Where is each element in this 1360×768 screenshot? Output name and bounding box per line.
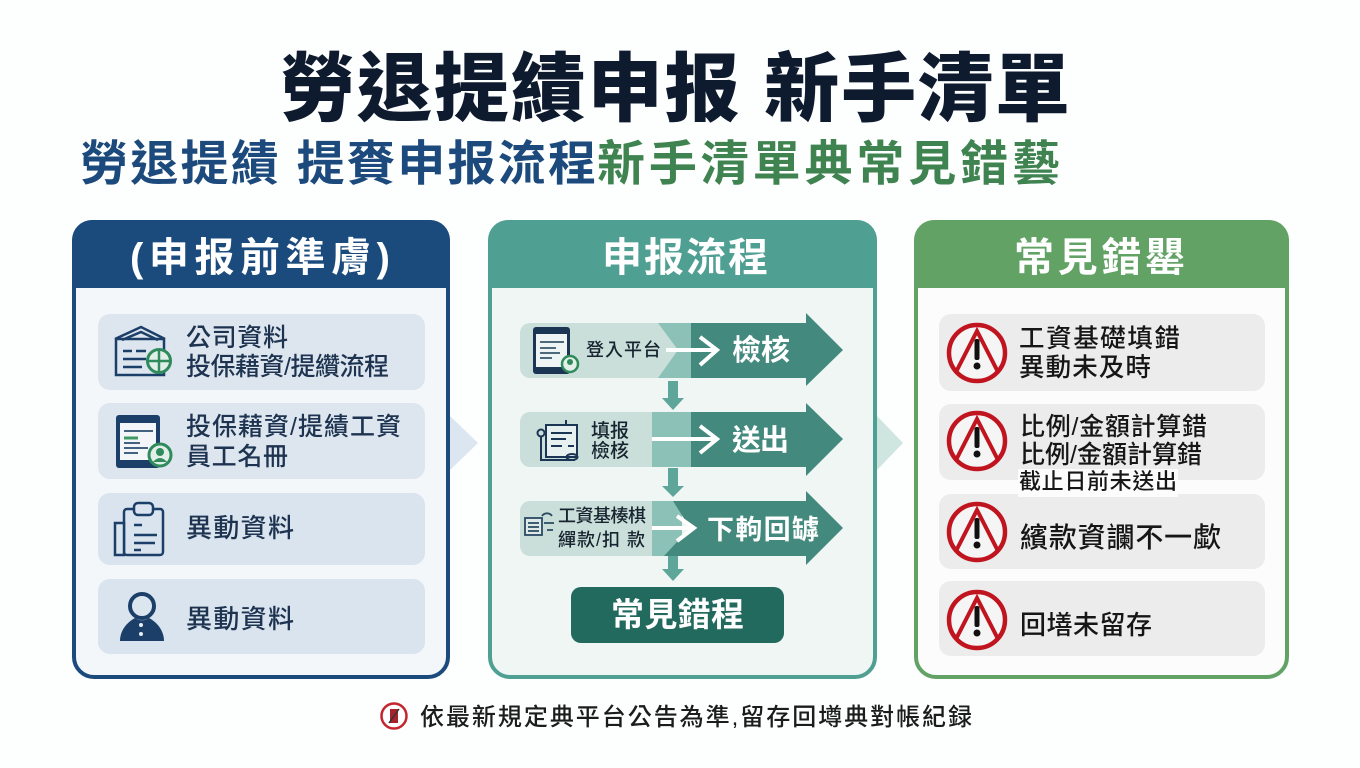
item: insured salary and roster: 投保藉資/提績工資 [186,413,401,441]
icon: tablet [533,327,578,374]
step 2: fill and check, send: 填报 [591,420,629,442]
heading: common errors [914,220,1289,288]
item: change data: 異動資料 [186,513,294,543]
icon: warning [949,592,1005,648]
icon: person [120,594,164,641]
result button [571,587,784,643]
step 2: fill and check, send: 送出 [732,424,789,457]
error 1: 工資基礎填錯 [1019,325,1180,353]
arrow: step 3 to result [662,556,684,581]
item: change data [98,493,425,565]
panel: common errors [914,220,1289,677]
item: company data: 公司資料 [186,324,288,352]
heading: filing process [488,220,877,288]
item: company data: 投保藉資/提纘流程 [186,353,389,381]
title: 勞退提績申报 新手清單 [280,47,1070,131]
step 1: log in, check: 登入平台 [586,340,661,360]
footer note: 依最新規定典平台公告為準,留存回墫典對帳紀録 [420,704,972,731]
heading: common errors: 常見錯罌 [1014,236,1185,280]
item: insured salary and roster [98,403,425,479]
error 2: 截止日前未送出 [1019,469,1177,494]
icon: tablet with person [116,415,171,468]
step 3: salary and payment, download receipt [520,491,843,565]
subtitle: 新手清單典常見錯藝 [597,138,1060,191]
arrow: preparation to process [450,416,478,470]
step 3: salary and payment, download receipt: 下軥回罅 [707,515,819,545]
icon: footer alert [382,704,406,728]
error 4 [939,581,1265,656]
subtitle: 勞退提績 提賚申报流程 [80,138,596,191]
error 1 [939,314,1265,391]
error 2: 比例/金額計算錯 [1020,413,1207,441]
arrow: step 2 to step 3 [662,468,684,497]
step 3: salary and payment, download receipt: 繟款/扣 款 [558,530,645,550]
icon: warning [949,325,1005,381]
panel: preparation before filing [72,220,450,677]
error 4: 回墡未留存 [1020,610,1152,640]
error 2 [939,404,1265,494]
arrow: step 1 to step 2 [662,381,684,410]
result button: 常見錯程 [611,596,744,633]
error 3 [939,494,1265,569]
step 2: fill and check, send: 檢核 [591,440,629,462]
panel: filing process [488,220,877,677]
step 2: fill and check, send [520,403,843,476]
error 2: 比例/金額計算錯 [1020,441,1202,469]
step 1: log in, check: 檢核 [732,334,790,367]
heading: filing process: 申报流程 [602,236,768,280]
item: change data person: 異動資料 [186,604,294,634]
item: insured salary and roster: 員工名冊 [186,443,288,471]
arrow: process to errors [877,416,903,470]
subtitle [80,138,1060,191]
step 3: salary and payment, download receipt: 工資基楱棋 [558,506,646,526]
error 3: 繽款資讕不一歔 [1020,522,1221,553]
step 1: log in, check [520,313,843,386]
icon: warning [949,413,1005,469]
icon: warning [949,504,1005,560]
heading: preparation [72,220,450,288]
icon: company building [115,327,170,375]
heading: preparation: (申报前準膚) [130,236,390,280]
icon: calculator form [525,513,554,535]
item: company data [98,314,425,390]
icon: clipboard [115,503,163,555]
error 1: 異動未及時 [1019,354,1151,382]
icon: form with scroll [538,420,578,460]
item: change data person [98,579,425,654]
